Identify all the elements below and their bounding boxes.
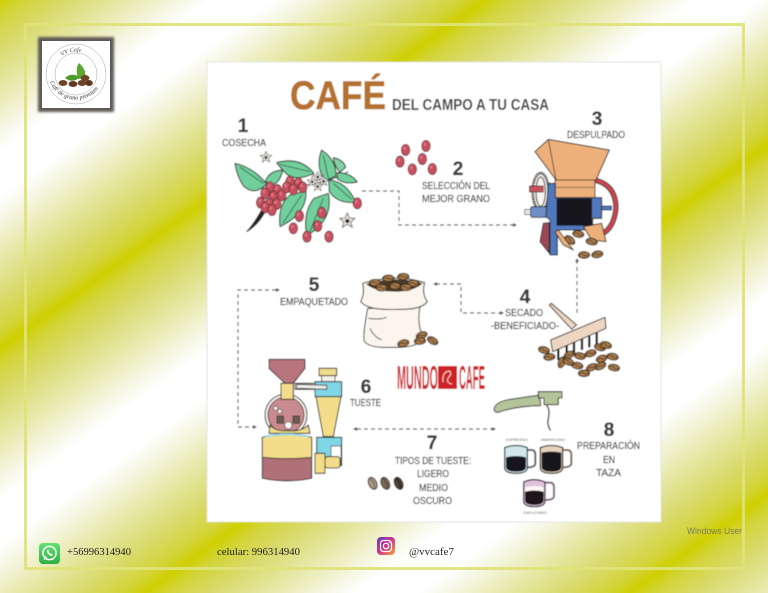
cup labels <box>506 437 565 515</box>
title: DEL CAMPO A TU CASA <box>392 97 549 114</box>
step 8: preparacion label: TAZA <box>596 468 621 479</box>
step 7: tipos de tueste label: TIPOS DE TUESTE: <box>395 456 471 467</box>
step 4: secado label <box>491 287 559 332</box>
step 2: seleccion label: 2 <box>453 159 463 180</box>
step 2: seleccion label <box>422 159 490 205</box>
cup labels: ESPRESSO <box>506 437 528 442</box>
logo badge: VV Cafe <box>60 47 82 56</box>
brand: mundo cafe: MUNDO <box>397 359 438 396</box>
step 1: cosecha label <box>222 116 266 149</box>
step 8: preparacion label: 8 <box>604 420 614 441</box>
step 6: tueste label: 6 <box>361 377 371 398</box>
step 3: despulpado label: 3 <box>592 109 602 130</box>
cup labels: AMERICANO <box>541 437 565 442</box>
arrow: empaquetado to tueste <box>238 288 280 429</box>
step 5: empaquetado label: 5 <box>309 275 320 296</box>
icon: three roast beans <box>366 476 405 491</box>
arrow: secado to empaquetado <box>433 282 504 315</box>
arrow: tueste to preparacion <box>353 427 496 431</box>
panel: infographic <box>207 62 661 522</box>
step 5: empaquetado label: EMPAQUETADO <box>280 297 348 308</box>
step 5: empaquetado label <box>280 275 348 308</box>
panel: infographic: CAFE <box>459 359 485 396</box>
step 3: despulpado label <box>567 109 625 141</box>
step 7: tipos de tueste label: LIGERO <box>417 469 449 480</box>
step 1: cosecha label: COSECHA <box>222 138 266 149</box>
icon: rake with coffee beans <box>538 303 620 377</box>
step 8: preparacion label: PREPARACIÓN <box>577 439 640 452</box>
author tag: Windows User <box>687 526 742 536</box>
icon: coffee cups <box>505 445 571 507</box>
step 3: despulpado label: DESPULPADO <box>567 130 625 141</box>
step 6: tueste label: TUESTE <box>350 398 381 409</box>
icon: portafilter <box>494 392 562 431</box>
instagram handle: @vvcafe7 <box>409 546 454 558</box>
icon: whatsapp <box>39 543 60 564</box>
step 7: tipos de tueste label <box>395 433 471 507</box>
cup labels: CAPUCHINO <box>523 510 547 515</box>
step 1: cosecha label: 1 <box>238 116 249 137</box>
whatsapp number: +56996314940 <box>67 546 131 558</box>
step 2: seleccion label: MEJOR GRANO <box>422 194 490 205</box>
step 4: secado label: -BENEFICIADO- <box>491 321 559 332</box>
title: CAFÉ <box>290 73 386 118</box>
step 4: secado label: SECADO <box>505 308 543 319</box>
step 8: preparacion label: EN <box>603 455 615 466</box>
step 7: tipos de tueste label: 7 <box>427 433 437 454</box>
arrow: despulpado to secado <box>575 258 579 313</box>
step 6: tueste label <box>350 377 381 409</box>
icon: coffee branch <box>235 150 362 242</box>
step 7: tipos de tueste label: MEDIO <box>419 483 448 494</box>
icon: instagram <box>377 537 395 555</box>
icon: coffee sack <box>361 273 439 348</box>
arrow: cosecha to despulpado <box>362 191 517 227</box>
cell number: celular: 996314940 <box>217 546 300 558</box>
icon: selected red beans <box>396 140 437 175</box>
icon: pulping machine <box>525 139 616 259</box>
icon: coffee roaster <box>262 359 342 481</box>
logo badge: Café de grano premium <box>50 81 98 101</box>
logo badge <box>36 35 116 114</box>
step 7: tipos de tueste label: OSCURO <box>413 496 452 507</box>
title <box>290 73 549 118</box>
step 8: preparacion label <box>577 420 640 479</box>
step 4: secado label: 4 <box>520 287 531 308</box>
step 2: seleccion label: SELECCIÓN DEL <box>422 179 490 192</box>
